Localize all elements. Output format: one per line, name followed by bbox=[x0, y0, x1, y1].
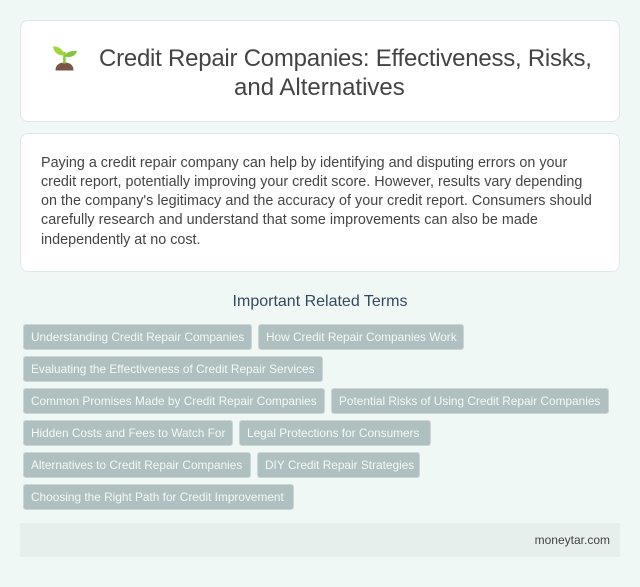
description text: carefully research and understand that some improvements can also be made bbox=[41, 212, 538, 228]
tag: DIY Credit Repair Strategies bbox=[265, 458, 414, 472]
tag bbox=[23, 388, 325, 414]
tag list bbox=[23, 324, 609, 510]
tag: Potential Risks of Using Credit Repair Companies bbox=[339, 394, 600, 408]
tag bbox=[258, 324, 464, 350]
tag bbox=[23, 452, 251, 478]
tag: Legal Protections for Consumers bbox=[247, 426, 419, 440]
tag: Hidden Costs and Fees to Watch For bbox=[31, 426, 225, 440]
title line 2: and Alternatives bbox=[234, 74, 405, 101]
description text: credit report, potentially improving your credit score. However, results vary depending bbox=[41, 174, 582, 190]
tag: Common Promises Made by Credit Repair Companies bbox=[31, 394, 317, 408]
icon: seedling bbox=[53, 46, 77, 70]
tag bbox=[23, 324, 252, 350]
tag bbox=[23, 420, 233, 446]
footer source text: moneytar.com bbox=[535, 533, 610, 547]
panel: title card bbox=[20, 20, 620, 122]
tag: Choosing the Right Path for Credit Improvement bbox=[31, 490, 284, 504]
description text: independently at no cost. bbox=[41, 232, 200, 248]
heading: important related terms: Important Related Terms bbox=[233, 293, 407, 310]
description text bbox=[41, 155, 592, 248]
tag bbox=[23, 484, 294, 510]
description text: Paying a credit repair company can help by identifying and disputing errors on your bbox=[41, 155, 567, 171]
title line 1: Credit Repair Companies: Effectiveness, Risks, bbox=[99, 45, 592, 72]
tag bbox=[23, 356, 323, 382]
tag bbox=[331, 388, 609, 414]
tag bbox=[257, 452, 420, 478]
tag: Alternatives to Credit Repair Companies bbox=[31, 458, 242, 472]
tag: Evaluating the Effectiveness of Credit Repair Services bbox=[31, 362, 315, 376]
description text: on the company's legitimacy and the accuracy of your credit report. Consumers should bbox=[41, 193, 592, 209]
tag: Understanding Credit Repair Companies bbox=[31, 330, 244, 344]
tag bbox=[239, 420, 431, 446]
footer bar bbox=[20, 523, 620, 557]
tag: How Credit Repair Companies Work bbox=[266, 330, 457, 344]
panel: description card bbox=[20, 133, 620, 272]
